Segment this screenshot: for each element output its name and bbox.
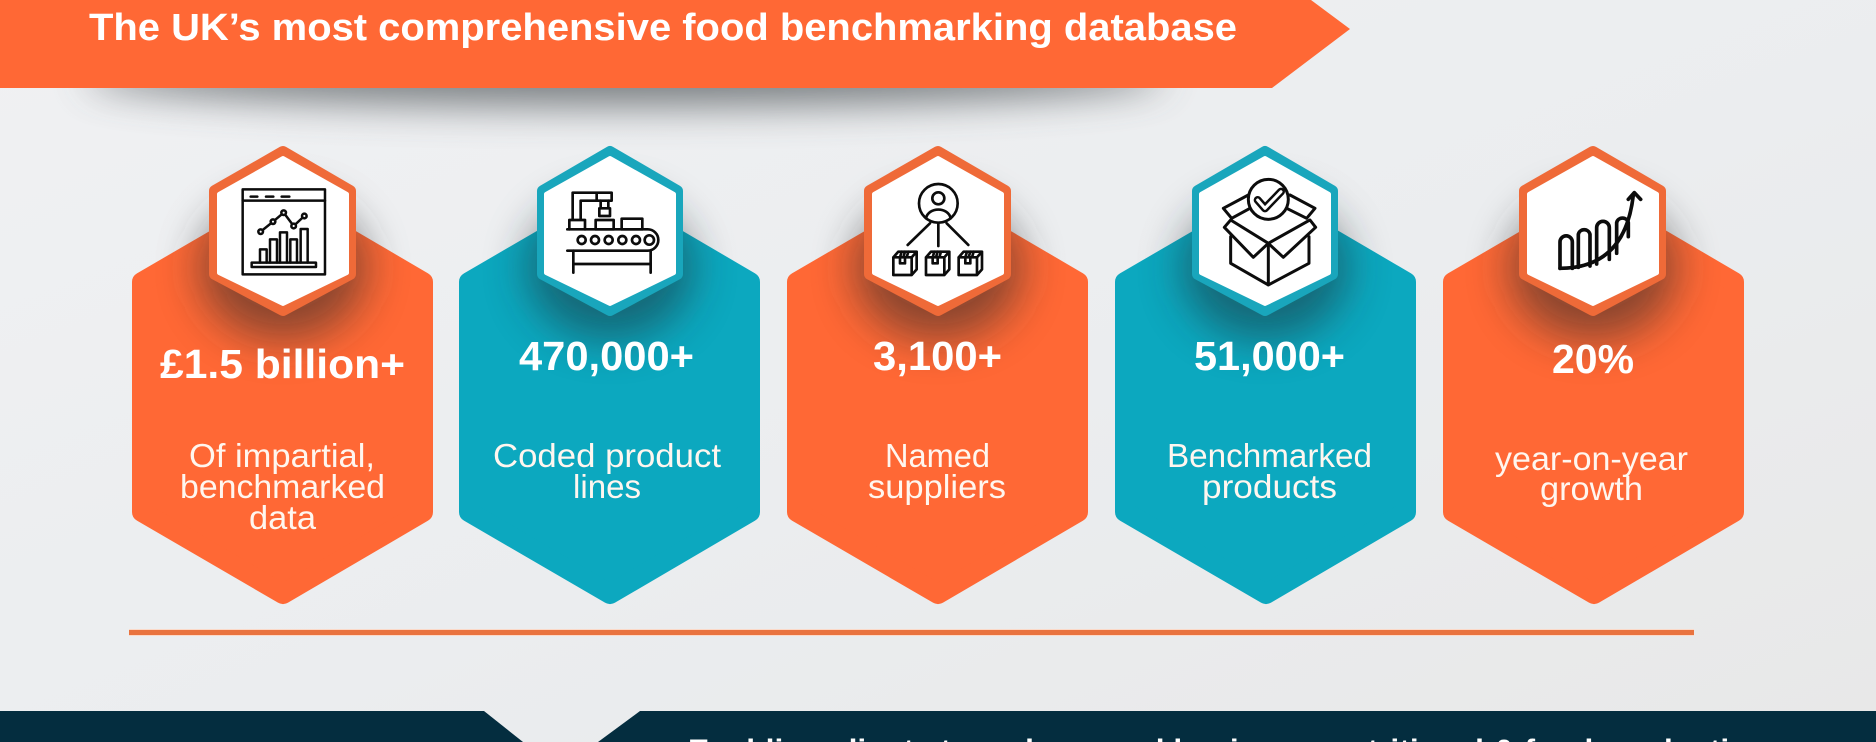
stat: 470,000+	[519, 333, 694, 379]
description	[1167, 437, 1372, 505]
panel: £1.5 billion+	[142, 152, 423, 594]
stat: £1.5 billion+	[160, 341, 405, 387]
icon: supplier network	[893, 184, 982, 275]
description: products	[1202, 468, 1337, 505]
icon: production line	[567, 193, 658, 273]
description	[1495, 440, 1688, 507]
icon: growth chart	[1560, 193, 1641, 268]
description: Named	[885, 437, 990, 474]
title banner	[0, 0, 1350, 88]
panel: 3,100+	[797, 152, 1078, 594]
description: Of impartial,	[189, 437, 375, 474]
stat: 20%	[1552, 336, 1634, 382]
description: growth	[1540, 470, 1643, 507]
description	[493, 437, 721, 505]
panel: 51,000+	[1125, 152, 1406, 594]
bottom right band	[598, 711, 1876, 742]
icon: analytics chart	[243, 189, 325, 274]
description	[868, 437, 1006, 505]
bottom left band	[0, 711, 523, 742]
banner shadow	[85, 46, 1165, 106]
description: lines	[573, 468, 641, 505]
description	[180, 437, 385, 536]
description: Benchmarked	[1167, 437, 1372, 474]
panel: 470,000+	[469, 152, 750, 594]
stat: 51,000+	[1194, 333, 1345, 379]
description: benchmarked	[180, 468, 385, 505]
description: data	[249, 499, 317, 536]
panel: 20%	[1453, 152, 1734, 594]
description: Coded product	[493, 437, 721, 474]
icon: approved box	[1223, 179, 1316, 285]
description: suppliers	[868, 468, 1006, 505]
title: The UK’s most comprehensive food benchmarking database	[89, 7, 1237, 49]
description: year-on-year	[1495, 440, 1688, 477]
stat: 3,100+	[873, 333, 1002, 379]
